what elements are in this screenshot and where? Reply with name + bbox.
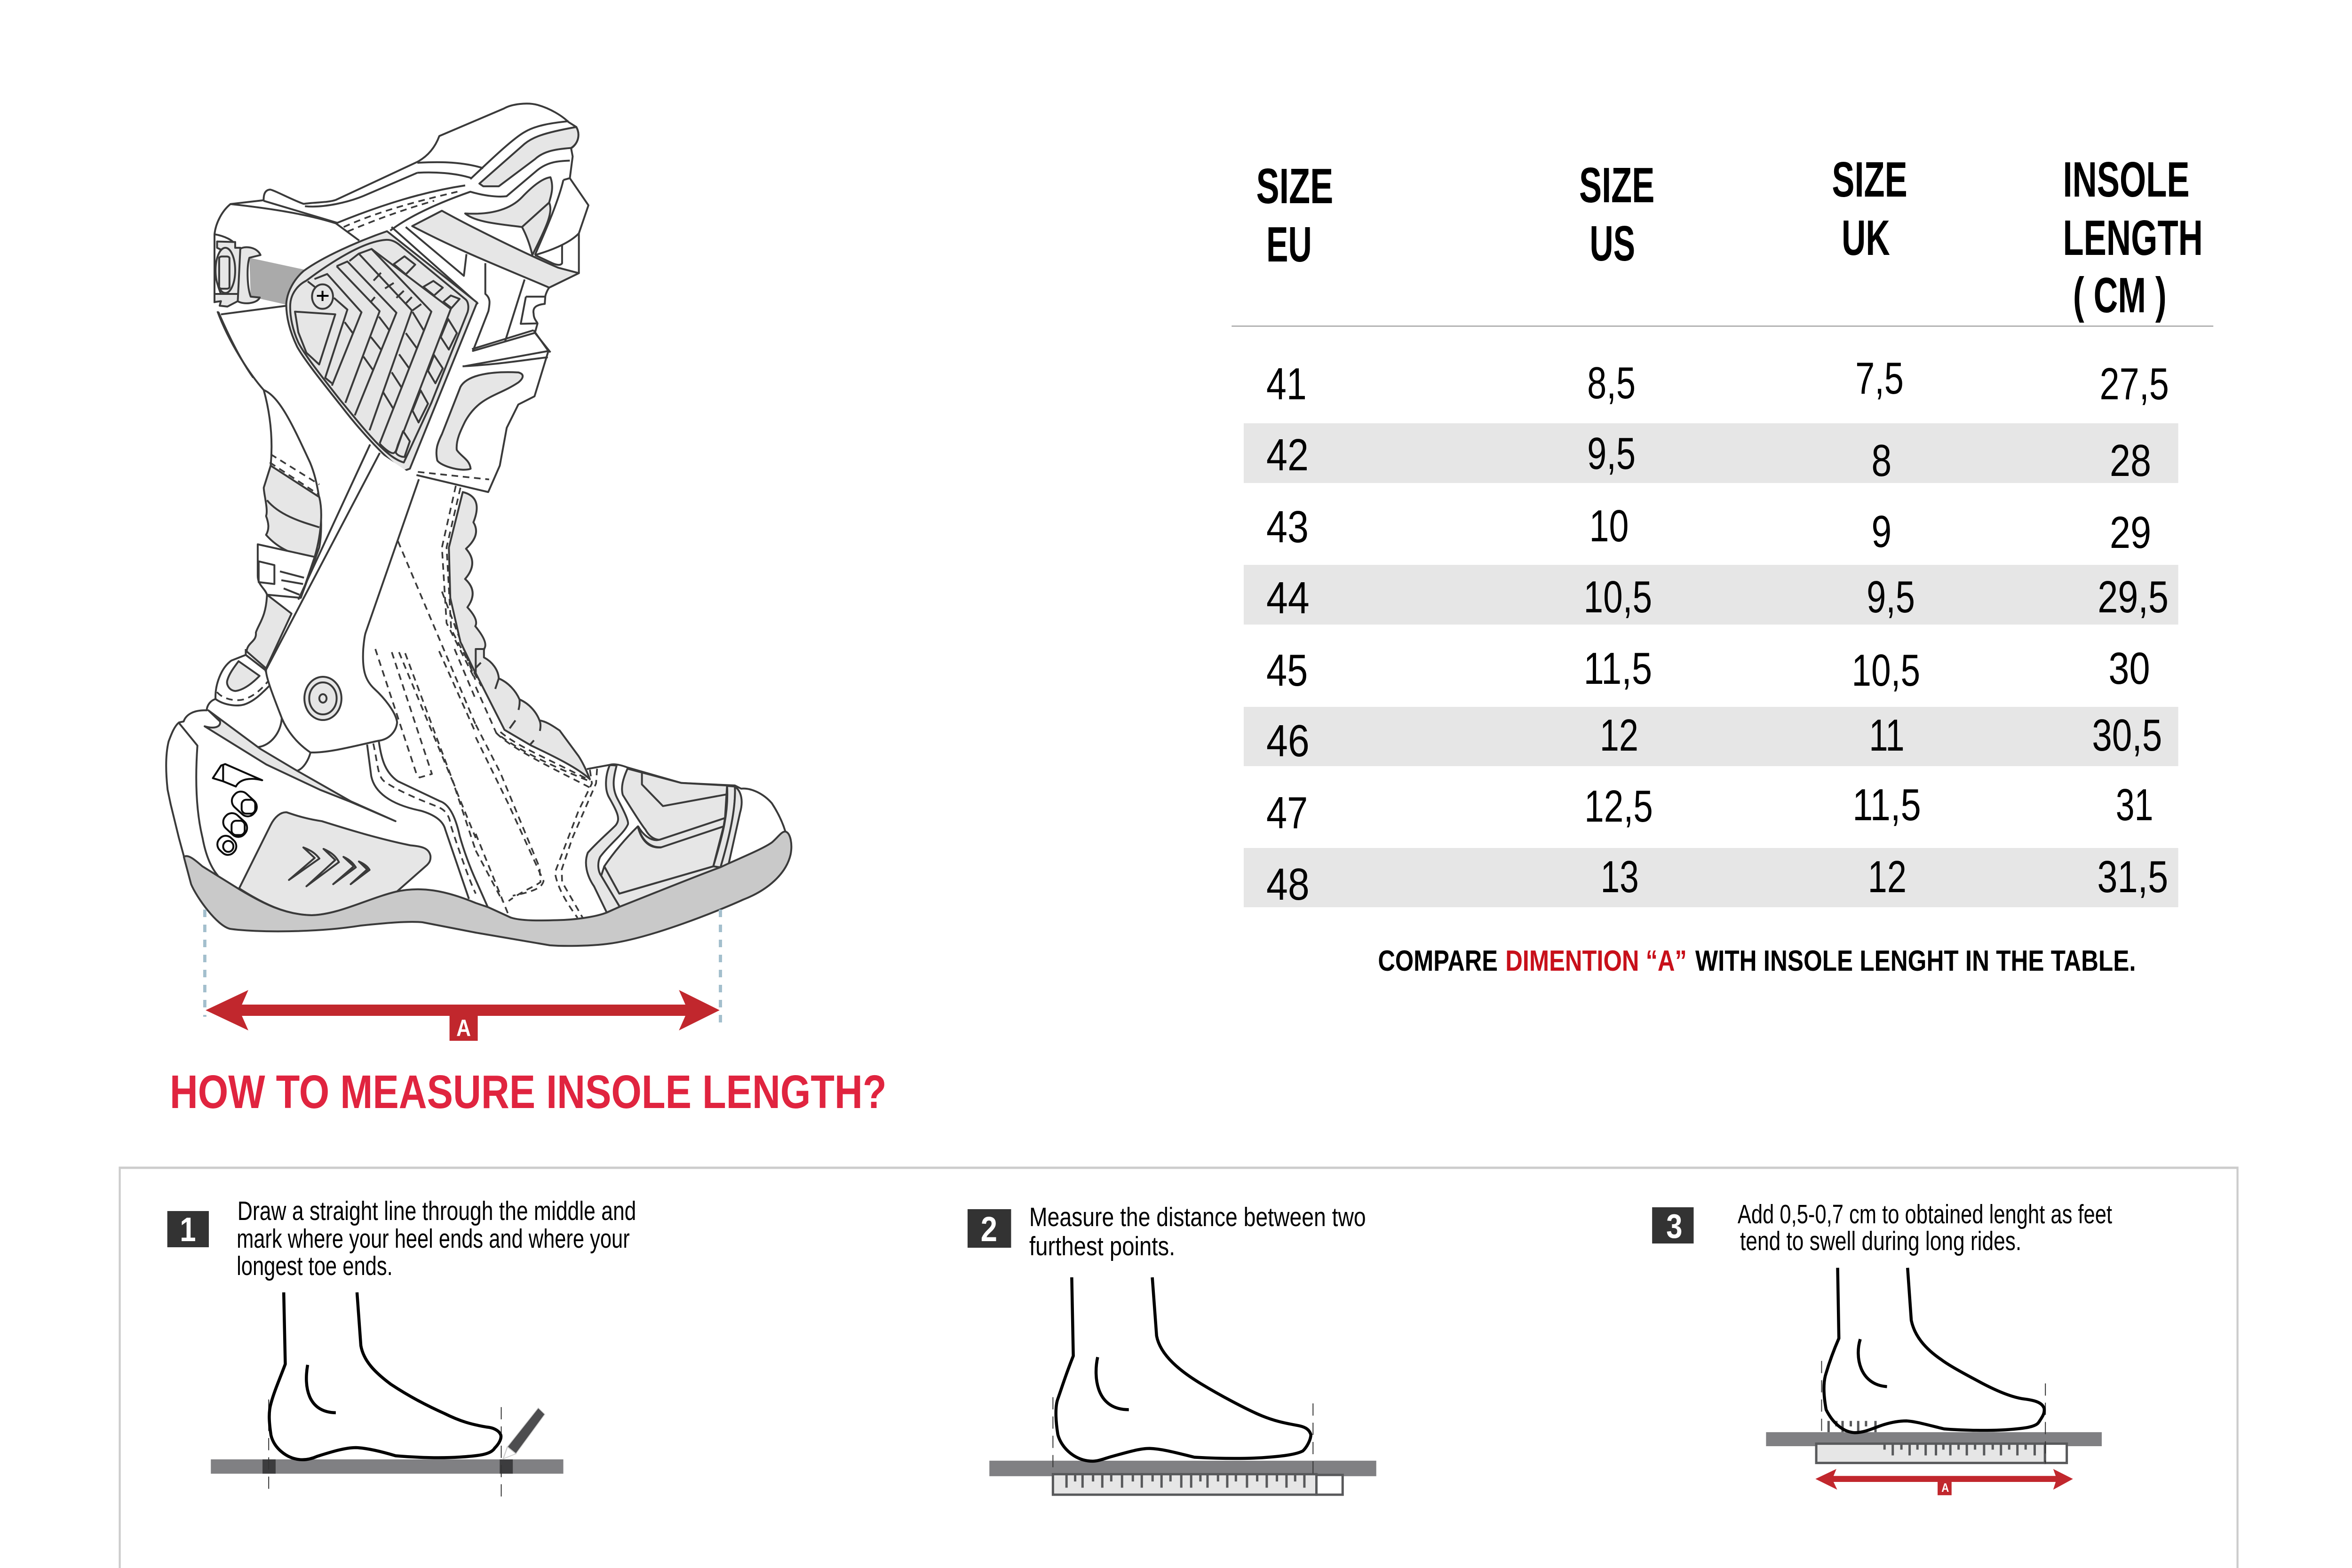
step 2 <box>968 1203 1376 1495</box>
compare caption: DIMENTION “A” <box>1505 945 1687 977</box>
column UK values <box>1851 353 1921 902</box>
icon: boot strap and buckle <box>215 241 304 307</box>
dimension A arrow with guides <box>205 910 721 1041</box>
step 1 badge: 1 <box>180 1211 196 1249</box>
chevron arrows <box>289 847 370 886</box>
compare caption: WITH INSOLE LENGHT IN THE TABLE. <box>1695 945 2136 977</box>
column US values <box>1583 357 1653 902</box>
column insole length values: 30,5 <box>2092 710 2162 760</box>
column insole length values: 31 <box>2116 779 2153 830</box>
ankle pad <box>215 649 278 705</box>
step 3 <box>1652 1200 2112 1495</box>
step 3 A label: A <box>1941 1481 1949 1495</box>
step 3 text: Add 0,5-0,7 cm to obtained lenght as feet <box>1738 1200 2112 1229</box>
column insole length values: 29 <box>2110 507 2151 557</box>
column EU values: 45 <box>1266 645 1308 695</box>
logo mark <box>213 764 262 786</box>
dimension A arrow with guides: A <box>456 1015 471 1041</box>
table headers: INSOLE <box>2063 151 2190 207</box>
step 1 text <box>237 1196 636 1281</box>
step 1 text: Draw a straight line through the middle and <box>238 1196 636 1226</box>
step 3 badge <box>1652 1207 1693 1245</box>
column UK values: 11 <box>1869 710 1905 760</box>
panel: measuring steps <box>120 1168 2238 1568</box>
column UK values: 12 <box>1868 851 1907 902</box>
step 2 text: Measure the distance between two <box>1029 1203 1366 1232</box>
column UK values: 9,5 <box>1867 571 1915 622</box>
table headers <box>1256 151 2203 323</box>
column EU values: 48 <box>1266 859 1310 909</box>
column insole length values: 29,5 <box>2098 571 2169 622</box>
column US values: 12,5 <box>1584 781 1653 831</box>
column US values: 9,5 <box>1587 428 1636 478</box>
step 2 text <box>1029 1203 1366 1261</box>
heel section with logo, vents and side panel <box>166 649 476 915</box>
toe section <box>476 649 785 918</box>
toe outline <box>610 764 785 831</box>
column EU values <box>1266 358 1310 909</box>
sole <box>184 832 791 946</box>
boot rear and front shaft <box>217 311 548 724</box>
table headers: SIZE <box>1832 151 1907 207</box>
column insole length values: 27,5 <box>2099 358 2169 409</box>
column insole length values <box>2092 358 2169 902</box>
column US values: 12 <box>1600 710 1638 760</box>
table headers: US <box>1589 215 1635 271</box>
front bellows lower <box>476 649 590 779</box>
column insole length values: 28 <box>2110 435 2151 485</box>
vent ovals <box>214 788 260 858</box>
toe guard panels <box>601 866 721 907</box>
column UK values: 9 <box>1871 506 1891 556</box>
table headers: SIZE <box>1579 157 1654 213</box>
panel border <box>120 1168 2238 1568</box>
step 2 badge: 2 <box>981 1210 997 1249</box>
boot upper cuff <box>215 103 588 378</box>
column EU values: 43 <box>1266 501 1309 552</box>
column UK values: 11,5 <box>1852 779 1921 830</box>
step 3 badge: 3 <box>1666 1208 1682 1245</box>
illustration: motorcycle boot <box>166 103 791 946</box>
column US values: 10,5 <box>1583 571 1652 622</box>
compare caption <box>1378 945 2136 977</box>
table headers: EU <box>1266 216 1312 272</box>
column UK values: 7,5 <box>1855 353 1904 403</box>
step 1 foot on line with pencil <box>211 1292 564 1498</box>
column UK values: 8 <box>1871 435 1891 485</box>
column insole length values: 30 <box>2108 643 2150 693</box>
step 1 text: mark where your heel ends and where your <box>237 1224 630 1254</box>
step 2 text: furthest points. <box>1029 1232 1175 1261</box>
column UK values: 10,5 <box>1851 645 1920 695</box>
step 3 text: tend to swell during long rides. <box>1740 1227 2021 1256</box>
column EU values: 44 <box>1266 572 1310 623</box>
table header rule <box>1232 325 2213 327</box>
table headers: SIZE <box>1256 158 1333 214</box>
column US values: 10 <box>1589 500 1629 551</box>
table headers: LENGTH <box>2063 210 2203 266</box>
column EU values: 46 <box>1266 715 1310 766</box>
step 3 text <box>1738 1200 2112 1256</box>
size table <box>1232 151 2213 909</box>
table headers: UK <box>1842 210 1890 266</box>
column US values: 8,5 <box>1587 357 1636 408</box>
column EU values: 42 <box>1266 429 1309 480</box>
compare caption: COMPARE <box>1378 945 1498 977</box>
step 2 badge <box>968 1209 1011 1249</box>
table headers: ( CM ) <box>2073 267 2167 323</box>
heading: how to measure: HOW TO MEASURE INSOLE LENGTH? <box>170 1066 887 1118</box>
shin guard with chevron vents <box>286 231 477 471</box>
step 1 <box>167 1196 636 1498</box>
heel side panel <box>239 812 430 915</box>
shin plate with pivot <box>266 444 419 752</box>
table zebra bands <box>1244 423 2178 907</box>
column EU values: 41 <box>1266 358 1307 409</box>
column US values: 11,5 <box>1583 643 1652 693</box>
step 1 badge <box>167 1211 209 1249</box>
column US values: 13 <box>1600 851 1639 902</box>
step 3 foot with ruler and arrow <box>1766 1268 2102 1495</box>
side seams <box>367 744 469 899</box>
column insole length values: 31,5 <box>2097 851 2168 902</box>
step 2 foot with ruler <box>989 1277 1376 1495</box>
step 1 text: longest toe ends. <box>237 1251 393 1281</box>
column EU values: 47 <box>1266 787 1308 838</box>
